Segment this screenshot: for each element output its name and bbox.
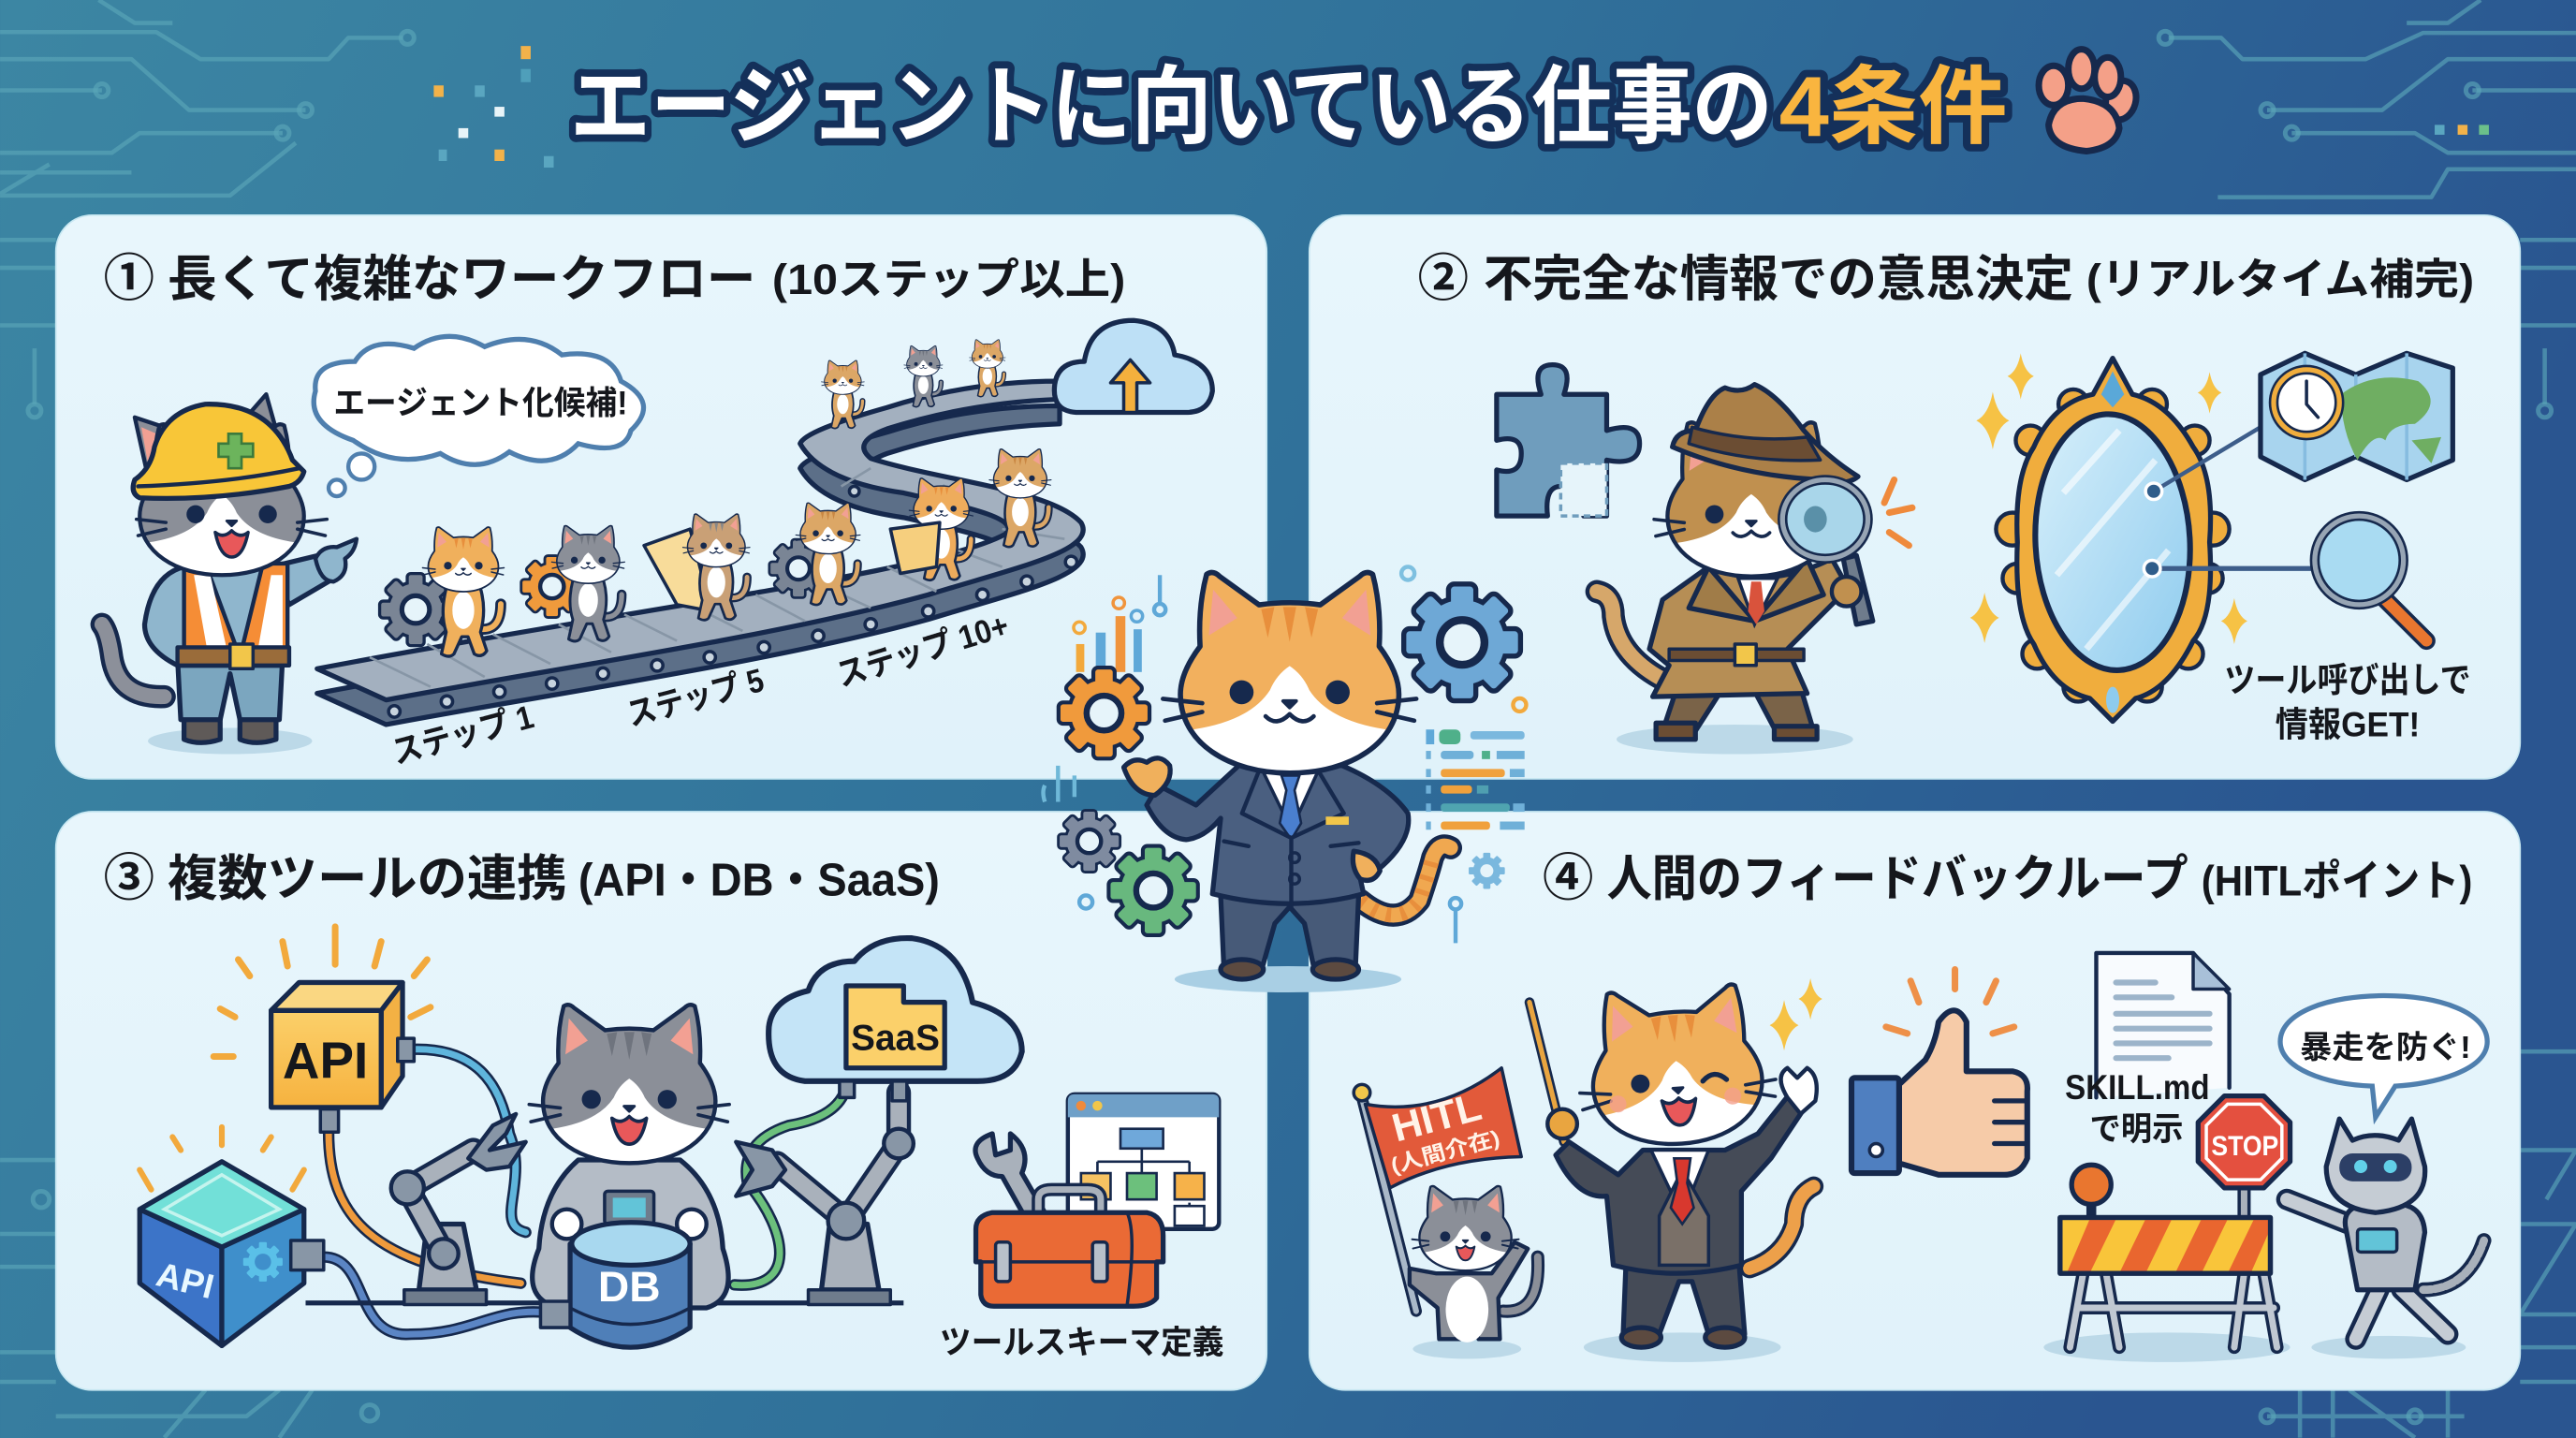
title: エージェントに向いている仕事の <box>570 60 1773 155</box>
robot arm left <box>391 1114 526 1304</box>
icon: toolbox with wrench <box>975 1134 1164 1306</box>
robot arm right <box>736 1093 914 1304</box>
tail <box>1360 846 1451 916</box>
title: 4条件 <box>1779 60 2008 155</box>
trousers <box>1221 895 1358 969</box>
barricade with stop sign: STOP <box>2211 1131 2278 1162</box>
gears <box>1061 669 1148 756</box>
icon: glowing API cube: API <box>153 1255 218 1306</box>
hands <box>1123 758 1380 880</box>
panel: condition 3 multi tool integration <box>56 812 1266 1390</box>
code lines <box>1426 729 1525 829</box>
speech bubble: 暴走を防ぐ! <box>2300 1031 2471 1065</box>
icon: upload cloud <box>1054 320 1212 413</box>
step labels: ステップ 1 <box>388 698 537 771</box>
caption: SKILL.md: SKILL.md <box>2065 1068 2210 1107</box>
central decorative icons <box>1044 566 1526 943</box>
shoes <box>1221 960 1358 979</box>
cables <box>305 1049 903 1334</box>
heading 1 <box>104 250 1125 307</box>
heading 2: ② <box>1418 250 1469 307</box>
icon: schema window <box>1068 1094 1219 1229</box>
panel: condition 4 human feedback loop <box>1310 812 2520 1390</box>
icon: DB cylinder <box>540 1223 690 1347</box>
head <box>1163 573 1416 773</box>
jacket <box>1147 766 1409 909</box>
panel: condition 2 incomplete information <box>1310 215 2520 779</box>
caption: SKILL.md <box>2065 1068 2210 1148</box>
conveyor belt <box>317 381 1083 725</box>
icon: thumbs up <box>1852 969 2027 1175</box>
caption: SKILL.md: で明示 <box>2089 1111 2183 1148</box>
step labels: ステップ 5 <box>623 662 768 733</box>
magnifier <box>1843 555 1873 624</box>
engineer cat with hard hat <box>102 394 357 755</box>
icon: document SKILL.md <box>2096 953 2230 1097</box>
heading 1: 長くて複雑なワークフロー <box>168 252 755 307</box>
icon: world map with clock <box>2261 353 2452 479</box>
detective cat <box>1597 385 1912 755</box>
heading 3 <box>104 849 940 906</box>
thought bubble <box>314 336 644 496</box>
caption: tool call: 情報GET! <box>2276 705 2420 743</box>
heading 1: (10ステップ以上) <box>772 256 1125 303</box>
cats walking on conveyor <box>381 340 1051 656</box>
step labels: ステップ 10+ <box>833 608 1013 694</box>
heading 3: 複数ツールの連携 <box>168 851 567 906</box>
heading 4: 人間のフィードバックループ <box>1606 851 2188 906</box>
central business cat <box>1123 573 1451 992</box>
small gray cat with HITL flag: HITL <box>1387 1084 1486 1150</box>
title decoration: data dashes <box>433 46 554 168</box>
icon: paw <box>2039 50 2141 151</box>
title decoration: right dashes <box>2435 125 2489 135</box>
icon: puzzle piece <box>1497 365 1640 516</box>
caption: tool call: ツール呼び出しで <box>2224 661 2471 699</box>
caption: tool schema definition: ツールスキーマ定義 <box>940 1325 1224 1361</box>
panel: condition 1 long workflow <box>56 215 1266 779</box>
step labels <box>388 608 1013 771</box>
barricade with stop sign <box>2043 1096 2291 1362</box>
icon: SaaS cloud <box>768 938 1022 1101</box>
thought bubble: エージェント化候補! <box>333 385 627 421</box>
icon: glowing API cube <box>139 1127 324 1345</box>
icon: SaaS cloud: SaaS <box>851 1018 940 1058</box>
heading 3: ③ <box>104 849 154 906</box>
heading 2: (リアルタイム補完) <box>2086 256 2474 303</box>
speech bubble <box>2280 996 2487 1117</box>
small gray cat with HITL flag: (人間介在) <box>1388 1125 1502 1178</box>
icon: magnifying glass <box>2315 516 2426 640</box>
dots and pins <box>1044 566 1526 943</box>
ornate mirror <box>1970 353 2315 721</box>
small gear <box>1469 853 1505 888</box>
icon: DB cylinder: DB <box>598 1263 661 1311</box>
caption: tool call <box>2224 661 2471 743</box>
robot cat <box>2287 1119 2484 1358</box>
heading 3: (API・DB・SaaS) <box>578 855 940 905</box>
robot suit cat holding DB <box>529 1005 729 1308</box>
main cat in suit with pointer <box>1530 978 1822 1362</box>
heading 2 <box>1418 250 2474 307</box>
heading 1: ① <box>104 250 154 307</box>
scroll document <box>644 529 711 611</box>
icon: API box <box>213 927 431 1132</box>
heading 4 <box>1543 849 2472 906</box>
small gray cat with HITL flag <box>1354 1068 1538 1358</box>
heading 2: 不完全な情報での意思決定 <box>1484 252 2073 307</box>
icon: API box: API <box>283 1032 368 1089</box>
detective hat <box>1673 385 1858 482</box>
heading 4: (HITLポイント) <box>2202 857 2472 904</box>
heading 4: ④ <box>1543 849 1593 906</box>
icon: bar chart <box>1074 575 1165 672</box>
ears behind hard hat <box>135 394 281 477</box>
